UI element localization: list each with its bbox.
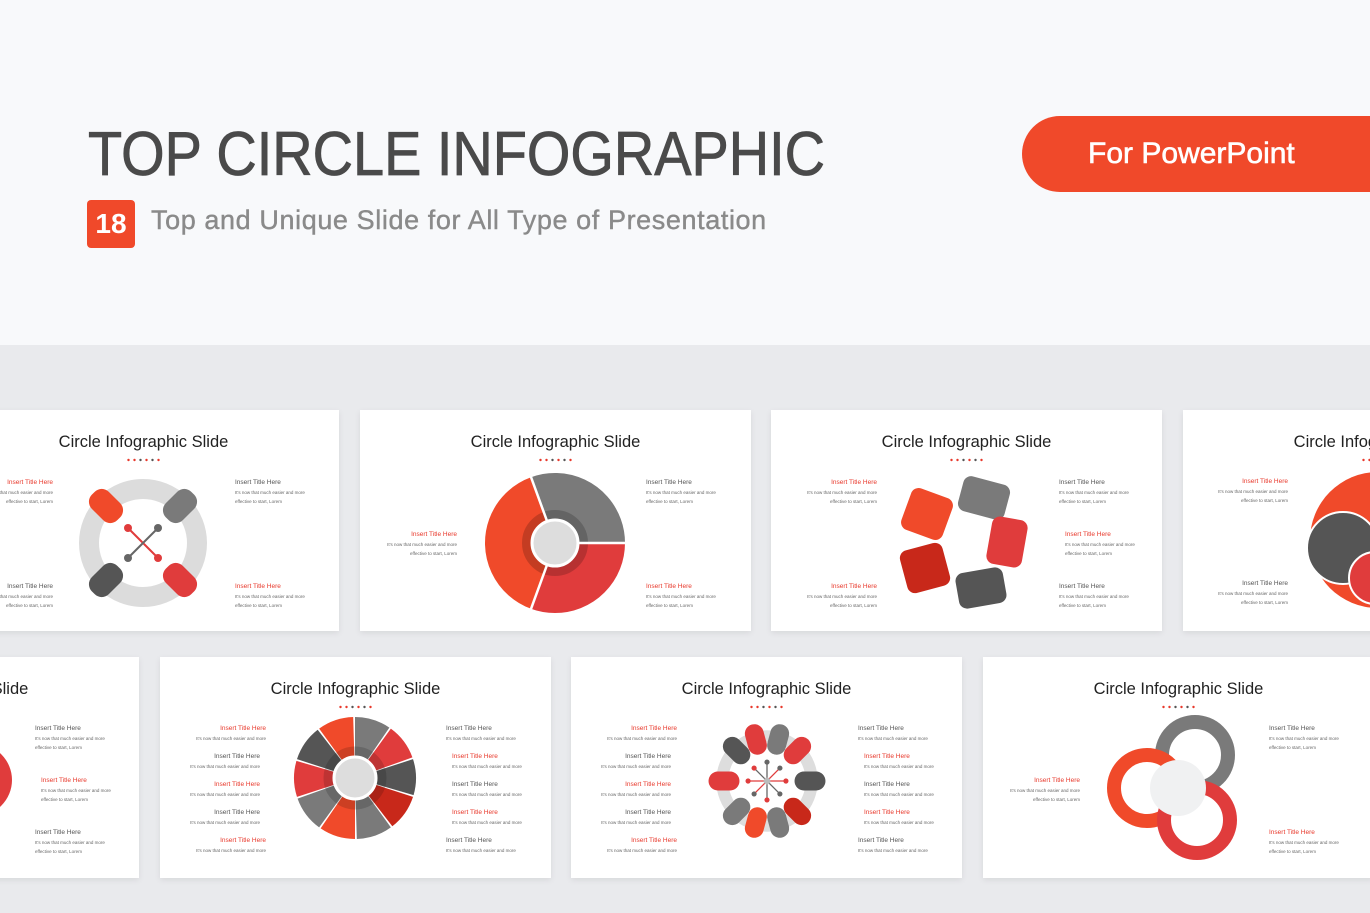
slide: three rings (row2 #4): effective to start, Lorem xyxy=(1269,745,1316,750)
slide: flower (row2 #3): It's now that much easier and more xyxy=(864,820,934,825)
slide: three rings (row2 #4) xyxy=(983,657,1370,878)
slide: partial (row2 #1): effective to start, Lorem xyxy=(35,745,82,750)
slide: donut 3 segments (row1 #2): It's now that much easier and more xyxy=(646,490,716,495)
slide: 10-segment wheel (row2 #2): It's now that much easier and more xyxy=(196,736,266,741)
slide: 10-segment wheel (row2 #2): It's now that much easier and more xyxy=(190,764,260,769)
slide: donut 3 segments (row1 #2): Insert Title Here xyxy=(411,531,457,538)
slide: cross ring (row1 #1): effective to start, Lorem xyxy=(6,499,53,504)
slide: 10-segment wheel (row2 #2): Insert Title Here xyxy=(452,809,498,816)
slide: partial (row2 #1): It's now that much easier and more xyxy=(35,840,105,845)
slide: overlapping circles (row1 #4): Insert Title Here xyxy=(1242,580,1288,587)
slide: 10-segment wheel (row2 #2): It's now that much easier and more xyxy=(446,736,516,741)
slide: donut 3 segments (row1 #2) xyxy=(360,410,751,631)
slide: flower (row2 #3): It's now that much easier and more xyxy=(601,820,671,825)
slide: three rings (row2 #4): Insert Title Here xyxy=(1269,829,1315,836)
slide: 10-segment wheel (row2 #2): Insert Title Here xyxy=(446,725,492,732)
slide: overlapping circles (row1 #4): effective to start, Lorem xyxy=(1241,498,1288,503)
slide: 10-segment wheel (row2 #2): It's now that much easier and more xyxy=(196,848,266,853)
slide: 10-segment wheel (row2 #2): Insert Title Here xyxy=(214,809,260,816)
slide: overlapping circles (row1 #4) xyxy=(1183,410,1370,631)
slide: puzzle circle (row1 #3): effective to start, Lorem xyxy=(830,499,877,504)
slide: 10-segment wheel (row2 #2): It's now that much easier and more xyxy=(446,848,516,853)
button: For PowerPoint: For PowerPoint xyxy=(1088,137,1295,170)
slide: three rings (row2 #4): It's now that much easier and more xyxy=(1269,736,1339,741)
badge: 18 xyxy=(87,200,135,248)
slide: puzzle circle (row1 #3) xyxy=(771,410,1162,631)
slide: cross ring (row1 #1): Insert Title Here xyxy=(235,583,281,590)
ring chart xyxy=(85,485,201,601)
slide: overlapping circles (row1 #4): It's now that much easier and more xyxy=(1218,591,1288,596)
slide: donut 3 segments (row1 #2): Circle Infographic Slide xyxy=(471,433,640,451)
slide: partial (row2 #1): It's now that much easier and more xyxy=(41,788,111,793)
slide: donut 3 segments (row1 #2): It's now that much easier and more xyxy=(387,542,457,547)
slide: 10-segment wheel (row2 #2): Insert Title Here xyxy=(220,725,266,732)
slide: partial (row2 #1): effective to start, Lorem xyxy=(35,849,82,854)
slide: 10-segment wheel (row2 #2): It's now that much easier and more xyxy=(452,792,522,797)
partial chart xyxy=(0,744,12,816)
slide: puzzle circle (row1 #3): Insert Title Here xyxy=(831,583,877,590)
slide: partial (row2 #1): Insert Title Here xyxy=(41,777,87,784)
slide: three rings (row2 #4): It's now that much easier and more xyxy=(1269,840,1339,845)
slide: flower (row2 #3): Insert Title Here xyxy=(864,753,910,760)
slide: cross ring (row1 #1): effective to start, Lorem xyxy=(6,603,53,608)
slide: cross ring (row1 #1): effective to start, Lorem xyxy=(235,603,282,608)
main title: TOP CIRCLE INFOGRAPHIC xyxy=(88,120,825,189)
slide: three rings (row2 #4): It's now that much easier and more xyxy=(1010,788,1080,793)
slide: 10-segment wheel (row2 #2): Insert Title Here xyxy=(446,837,492,844)
slide: donut 3 segments (row1 #2): Insert Title Here xyxy=(646,583,692,590)
slide: partial (row2 #1): Insert Title Here xyxy=(35,829,81,836)
slide: flower (row2 #3): Insert Title Here xyxy=(625,809,671,816)
slide: donut 3 segments (row1 #2): effective to start, Lorem xyxy=(646,499,693,504)
slide: overlapping circles (row1 #4): effective to start, Lorem xyxy=(1241,600,1288,605)
wheel chart xyxy=(298,721,412,835)
slide: three rings (row2 #4): effective to start, Lorem xyxy=(1269,849,1316,854)
donut chart xyxy=(495,475,627,611)
slide: puzzle circle (row1 #3): It's now that much easier and more xyxy=(807,594,877,599)
slide: puzzle circle (row1 #3): Insert Title Here xyxy=(1059,583,1105,590)
header background xyxy=(0,0,1370,345)
slide: flower (row2 #3): Insert Title Here xyxy=(631,725,677,732)
slide: cross ring (row1 #1) xyxy=(0,410,339,631)
subtitle: Top and Unique Slide for All Type of Presentation xyxy=(151,205,767,235)
slide: partial (row2 #1): It's now that much easier and more xyxy=(35,736,105,741)
badge: 18: 18 xyxy=(95,208,127,239)
rings chart xyxy=(1114,722,1230,853)
slide: overlapping circles (row1 #4): It's now that much easier and more xyxy=(1218,489,1288,494)
slide: puzzle circle (row1 #3): effective to start, Lorem xyxy=(1065,551,1112,556)
slide: partial (row2 #1): Insert Title Here xyxy=(35,725,81,732)
slide: donut 3 segments (row1 #2): It's now that much easier and more xyxy=(646,594,716,599)
slide: 10-segment wheel (row2 #2) xyxy=(160,657,551,878)
slide: puzzle circle (row1 #3): It's now that much easier and more xyxy=(807,490,877,495)
slide: flower (row2 #3): It's now that much easier and more xyxy=(607,736,677,741)
slide: donut 3 segments (row1 #2): Insert Title Here xyxy=(646,479,692,486)
slide: flower (row2 #3): Insert Title Here xyxy=(864,809,910,816)
slide: overlapping circles (row1 #4): Insert Title Here xyxy=(1242,478,1288,485)
slide: 10-segment wheel (row2 #2): Insert Title Here xyxy=(452,781,498,788)
slide: donut 3 segments (row1 #2): effective to start, Lorem xyxy=(646,603,693,608)
slide: cross ring (row1 #1): Insert Title Here xyxy=(7,583,53,590)
slide: flower (row2 #3): It's now that much easier and more xyxy=(601,792,671,797)
slide: cross ring (row1 #1): effective to start, Lorem xyxy=(235,499,282,504)
button: For PowerPoint xyxy=(1022,116,1370,192)
slide: 10-segment wheel (row2 #2): It's now that much easier and more xyxy=(190,792,260,797)
slide: flower (row2 #3): It's now that much easier and more xyxy=(864,764,934,769)
slide: flower (row2 #3): Insert Title Here xyxy=(864,781,910,788)
slide: three rings (row2 #4): effective to start, Lorem xyxy=(1033,797,1080,802)
slide: 10-segment wheel (row2 #2): It's now that much easier and more xyxy=(452,764,522,769)
slide: puzzle circle (row1 #3): Circle Infographic Slide xyxy=(882,433,1051,451)
slide: donut 3 segments (row1 #2): effective to start, Lorem xyxy=(410,551,457,556)
slide: cross ring (row1 #1): It's now that much easier and more xyxy=(235,490,305,495)
slide: flower (row2 #3): Insert Title Here xyxy=(625,753,671,760)
slide: puzzle circle (row1 #3): effective to start, Lorem xyxy=(830,603,877,608)
slide: puzzle circle (row1 #3): Insert Title Here xyxy=(831,479,877,486)
slide: flower (row2 #3): It's now that much easier and more xyxy=(601,764,671,769)
slide: puzzle circle (row1 #3): effective to start, Lorem xyxy=(1059,499,1106,504)
slide: 10-segment wheel (row2 #2): Insert Title Here xyxy=(452,753,498,760)
slide: three rings (row2 #4): Insert Title Here xyxy=(1269,725,1315,732)
slide: flower (row2 #3): It's now that much easier and more xyxy=(607,848,677,853)
slide: 10-segment wheel (row2 #2): Insert Title Here xyxy=(214,781,260,788)
slide: puzzle circle (row1 #3): effective to start, Lorem xyxy=(1059,603,1106,608)
slide: cross ring (row1 #1): Circle Infographic Slide xyxy=(59,433,228,451)
slide: 10-segment wheel (row2 #2): It's now that much easier and more xyxy=(190,820,260,825)
slide: flower (row2 #3) xyxy=(571,657,962,878)
slide: 10-segment wheel (row2 #2): Circle Infographic Slide xyxy=(271,680,440,698)
slide: flower (row2 #3): Insert Title Here xyxy=(631,837,677,844)
slide: cross ring (row1 #1): It's now that much easier and more xyxy=(235,594,305,599)
slide: partial (row2 #1): effective to start, Lorem xyxy=(41,797,88,802)
slide: puzzle circle (row1 #3): Insert Title Here xyxy=(1065,531,1111,538)
slide: flower (row2 #3): It's now that much easier and more xyxy=(858,736,928,741)
slide: three rings (row2 #4): Circle Infographic Slide xyxy=(1094,680,1263,698)
slide: 10-segment wheel (row2 #2): Insert Title Here xyxy=(220,837,266,844)
slide: puzzle circle (row1 #3): It's now that much easier and more xyxy=(1065,542,1135,547)
slide: puzzle circle (row1 #3): It's now that much easier and more xyxy=(1059,490,1129,495)
slide: flower (row2 #3): It's now that much easier and more xyxy=(864,792,934,797)
circles chart xyxy=(1307,472,1370,608)
slide: cross ring (row1 #1): Insert Title Here xyxy=(235,479,281,486)
slide: flower (row2 #3): Circle Infographic Slide xyxy=(682,680,851,698)
slide: flower (row2 #3): It's now that much easier and more xyxy=(858,848,928,853)
slide: flower (row2 #3): Insert Title Here xyxy=(858,837,904,844)
puzzle chart xyxy=(898,474,1029,610)
slide: partial (row2 #1) xyxy=(0,657,139,878)
slide: 10-segment wheel (row2 #2): Insert Title Here xyxy=(214,753,260,760)
slide: cross ring (row1 #1): Insert Title Here xyxy=(7,479,53,486)
slide: puzzle circle (row1 #3): It's now that much easier and more xyxy=(1059,594,1129,599)
slide: flower (row2 #3): Insert Title Here xyxy=(858,725,904,732)
slide: puzzle circle (row1 #3): Insert Title Here xyxy=(1059,479,1105,486)
slide: 10-segment wheel (row2 #2): It's now that much easier and more xyxy=(452,820,522,825)
slide: flower (row2 #3): Insert Title Here xyxy=(625,781,671,788)
slide: three rings (row2 #4): Insert Title Here xyxy=(1034,777,1080,784)
flower chart xyxy=(709,722,825,840)
